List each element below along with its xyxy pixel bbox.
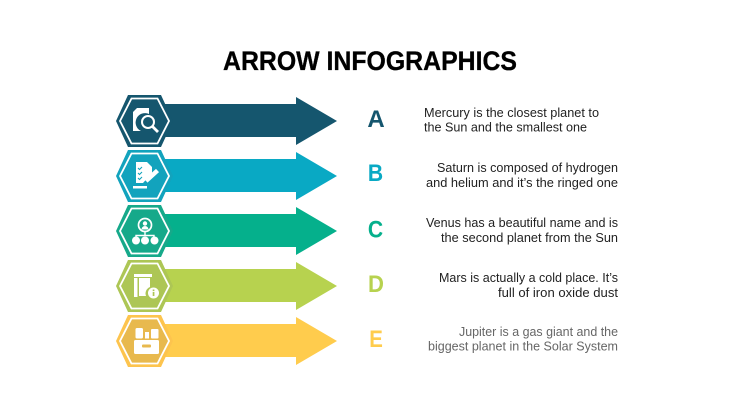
text block C bbox=[426, 216, 618, 245]
text block B: Saturn is composed of hydrogen bbox=[437, 161, 618, 175]
text block B bbox=[426, 161, 618, 190]
arrow C bbox=[160, 207, 337, 255]
icon: document search bbox=[133, 108, 158, 132]
text block E bbox=[428, 325, 618, 354]
arrow A bbox=[160, 97, 337, 145]
text block B: and helium and it’s the ringed one bbox=[426, 176, 618, 190]
hexagon A bbox=[116, 95, 173, 147]
text block D: Mars is actually a cold place. It’s bbox=[439, 271, 618, 285]
arrow B bbox=[160, 152, 337, 200]
arrow E bbox=[160, 317, 337, 365]
text block E: Jupiter is a gas giant and the bbox=[459, 325, 618, 339]
text block A: the Sun and the smallest one bbox=[424, 120, 587, 134]
text block D bbox=[439, 271, 619, 300]
icon: book with info badge bbox=[134, 274, 159, 298]
arrow D bbox=[160, 262, 337, 310]
icon: organisation chart bbox=[132, 218, 158, 244]
hexagon D bbox=[116, 260, 173, 312]
hexagon C bbox=[116, 205, 173, 257]
letter B: B bbox=[368, 160, 383, 186]
title: ARROW INFOGRAPHICS bbox=[223, 46, 517, 76]
letter E: E bbox=[369, 325, 383, 352]
hexagon E bbox=[116, 315, 173, 367]
row E: arrow with hexagon icon bbox=[116, 315, 337, 367]
text block E: biggest planet in the Solar System bbox=[428, 340, 618, 354]
text block D: full of iron oxide dust bbox=[498, 286, 619, 300]
icon: box with items bbox=[134, 328, 159, 354]
hexagon B bbox=[116, 150, 173, 202]
letter D: D bbox=[368, 270, 384, 297]
letter C: C bbox=[368, 216, 383, 243]
text block C: Venus has a beautiful name and is bbox=[426, 216, 618, 230]
text block A: Mercury is the closest planet to bbox=[424, 106, 599, 120]
row A: arrow with hexagon icon bbox=[116, 95, 337, 147]
row C: arrow with hexagon icon bbox=[116, 205, 337, 257]
text block C: the second planet from the Sun bbox=[441, 231, 618, 245]
text block A bbox=[424, 106, 599, 134]
row D: arrow with hexagon icon bbox=[116, 260, 337, 312]
row B: arrow with hexagon icon bbox=[116, 150, 337, 202]
letter A: A bbox=[367, 106, 385, 133]
icon: checklist and pencil bbox=[133, 162, 158, 188]
